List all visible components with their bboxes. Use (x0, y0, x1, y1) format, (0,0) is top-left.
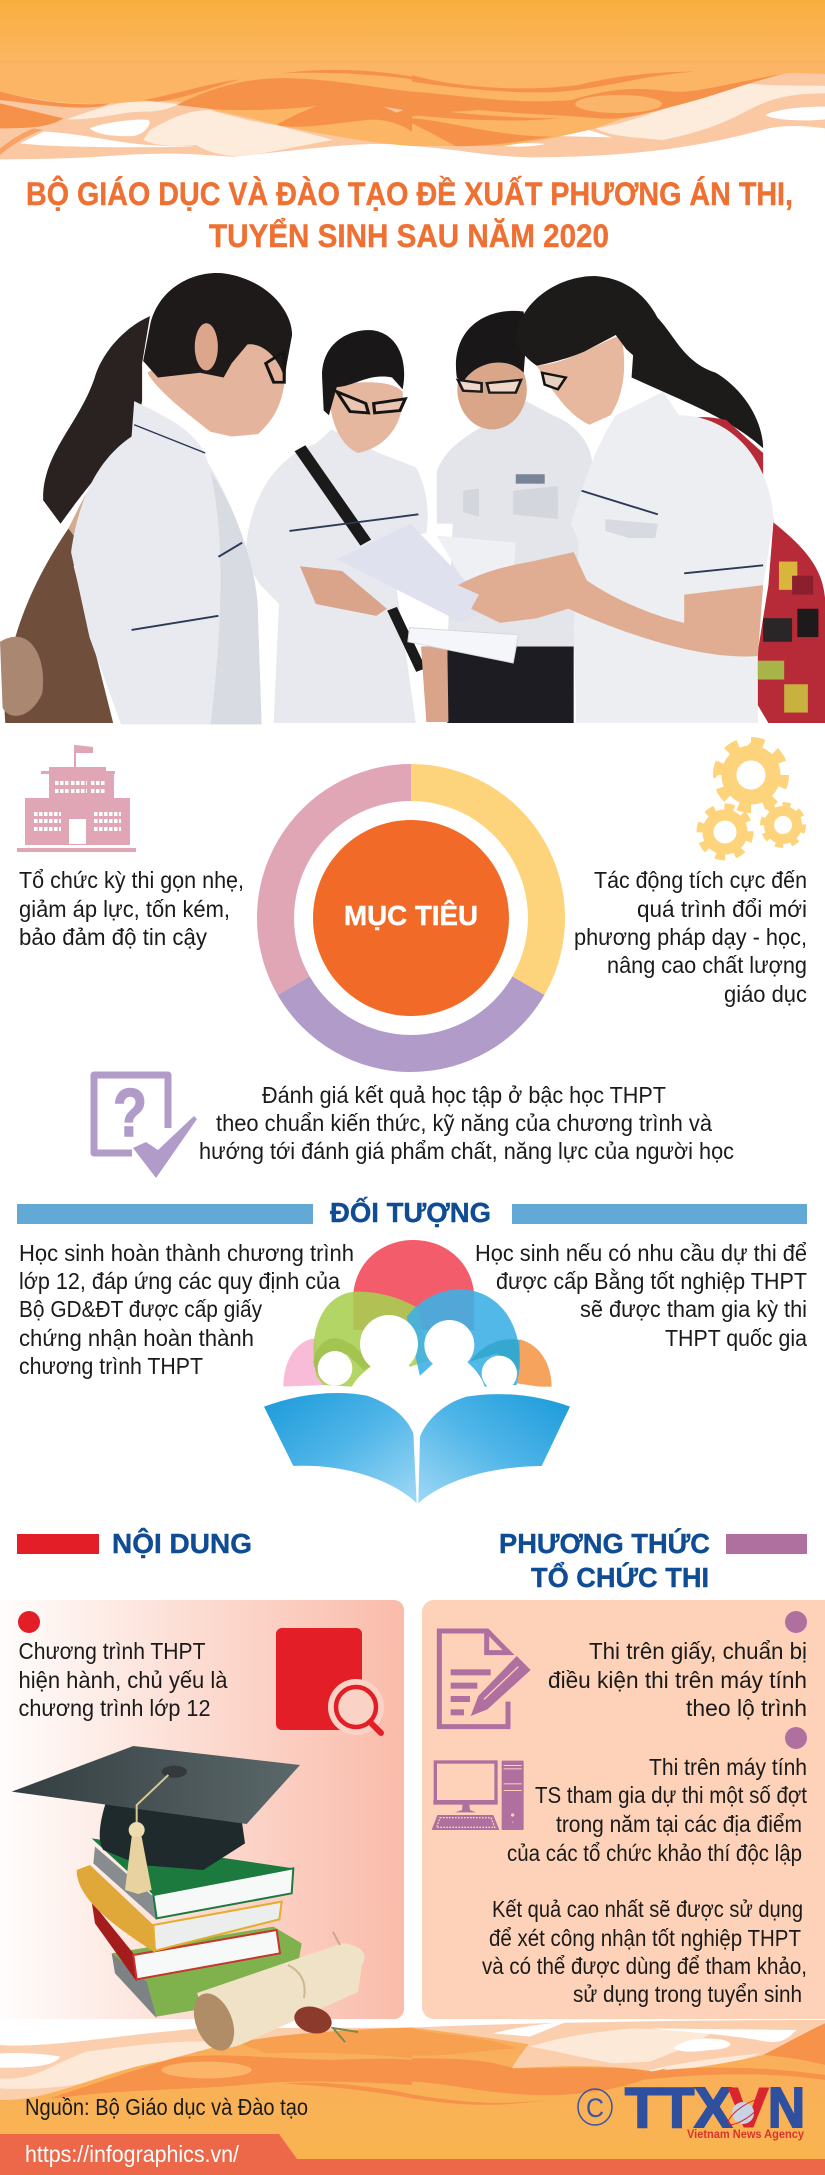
text: goal right: giáo dục (724, 981, 807, 1007)
text: audience left: chương trình THPT (19, 1353, 203, 1379)
section heading: phuong thuc to chuc thi: TỔ CHỨC THI (531, 1562, 709, 1593)
ring segment: purple (278, 976, 544, 1072)
muc tieu donut chart (257, 764, 565, 1072)
text: paper exam (548, 1638, 807, 1721)
icon: document with magnifier (276, 1628, 384, 1735)
header wave band (0, 0, 825, 159)
icon: question and check (94, 1075, 197, 1178)
text: audience left: Bộ GD&ĐT được cấp giấy (19, 1296, 262, 1322)
panel: phuong thuc background (422, 1600, 825, 2019)
icon: school building (17, 745, 136, 852)
text: audience right (475, 1240, 807, 1351)
text: computer exam: Thi trên máy tính (649, 1754, 807, 1780)
bullet dot (785, 1611, 807, 1633)
text: audience right: sẽ được tham gia kỳ thi (580, 1296, 807, 1322)
section heading: phuong thuc to chuc thi (499, 1528, 807, 1593)
centre label: MỤC TIÊU (344, 900, 478, 931)
text: noi dung: hiện hành, chủ yếu là (18, 1667, 228, 1693)
text: goal right: phương pháp dạy - học, (574, 924, 807, 950)
section heading: noi dung (17, 1527, 252, 1559)
ring segment: pink (257, 764, 411, 995)
section heading: phuong thuc to chuc thi: PHƯƠNG THỨC (499, 1528, 710, 1559)
text: audience left: chứng nhận hoàn thành (19, 1325, 254, 1351)
logo: TTXVN: Vietnam News Agency (687, 2127, 804, 2141)
illustration: cap and books (12, 1746, 302, 2018)
text: goal right: quá trình đổi mới (637, 896, 807, 922)
bullet dot (785, 1727, 807, 1749)
text: results usage (482, 1896, 807, 2007)
icon: question and check: ? (113, 1075, 147, 1151)
text: goal bottom: theo chuẩn kiến thức, kỹ năng của chương trình và (216, 1110, 712, 1136)
text: goal bottom: hướng tới đánh giá phẩm chất, năng lực của người học (199, 1138, 734, 1164)
text: results usage: sử dụng trong tuyển sinh (573, 1981, 802, 2007)
title (26, 176, 793, 254)
section heading: noi dung: NỘI DUNG (112, 1527, 252, 1559)
photo: students reading exam papers (0, 273, 825, 724)
text: goal right: Tác động tích cực đến (594, 867, 807, 893)
icon: document and pencil (439, 1631, 531, 1727)
text: audience right: Học sinh nếu có nhu cầu dự thi để (475, 1240, 807, 1266)
footer url bar: https://infographics.vn/ (25, 2141, 240, 2167)
centre circle (313, 820, 509, 1016)
text: goal left: Tổ chức kỳ thi gọn nhẹ, (19, 867, 244, 893)
logo: TTXVN: V (728, 2076, 769, 2140)
text: audience left: lớp 12, đáp ứng các quy định của (19, 1268, 340, 1294)
text: goal bottom (199, 1082, 734, 1164)
text: audience right: THPT quốc gia (665, 1325, 807, 1351)
text: audience left (19, 1240, 354, 1379)
text: goal left: giảm áp lực, tốn kém, (19, 896, 230, 922)
panel: noi dung content (12, 1611, 384, 2057)
title: TUYỂN SINH SAU NĂM 2020 (209, 218, 609, 254)
text: goal left: bảo đảm độ tin cậy (19, 924, 207, 950)
text: noi dung (18, 1638, 228, 1721)
logo: TTXVN: C (586, 2093, 604, 2123)
text: noi dung: chương trình lớp 12 (18, 1695, 210, 1721)
logo: TTXVN: TTX (625, 2076, 732, 2140)
ring segment: yellow (411, 764, 565, 995)
text: computer exam: trong năm tại các địa điểm (556, 1811, 802, 1837)
panel: noi dung background (0, 1600, 404, 2019)
panel: phuong thuc content (432, 1611, 808, 2007)
text: audience right: được cấp Bằng tốt nghiệp THPT (496, 1268, 807, 1294)
text: audience left: Học sinh hoàn thành chương trình (19, 1240, 354, 1266)
section heading: doi tuong (17, 1196, 807, 1228)
text: goal bottom: Đánh giá kết quả học tập ở bậc học THPT (262, 1082, 666, 1108)
text: computer exam (507, 1754, 808, 1866)
icon: people over open book (264, 1240, 570, 1503)
source credit: Nguồn: Bộ Giáo dục và Đào tạo (25, 2094, 308, 2120)
bullet dot (18, 1611, 40, 1633)
icon: gears (700, 742, 803, 857)
section heading: doi tuong: ĐỐI TƯỢNG (330, 1196, 491, 1228)
icon: desktop computer (432, 1761, 524, 1830)
text: paper exam: điều kiện thi trên máy tính (548, 1667, 807, 1693)
logo: TTXVN (578, 2076, 805, 2141)
text: noi dung: Chương trình THPT (18, 1638, 206, 1664)
text: goal right (574, 867, 807, 1007)
footer wave band (0, 2020, 825, 2175)
logo: TTXVN: N (768, 2076, 805, 2140)
text: paper exam: theo lộ trình (686, 1695, 807, 1721)
text: goal left (19, 867, 244, 950)
illustration: diploma scroll (186, 1932, 365, 2057)
text: goal right: nâng cao chất lượng (607, 952, 807, 978)
footer url bar (0, 2134, 825, 2175)
text: paper exam: Thi trên giấy, chuẩn bị (589, 1638, 807, 1664)
